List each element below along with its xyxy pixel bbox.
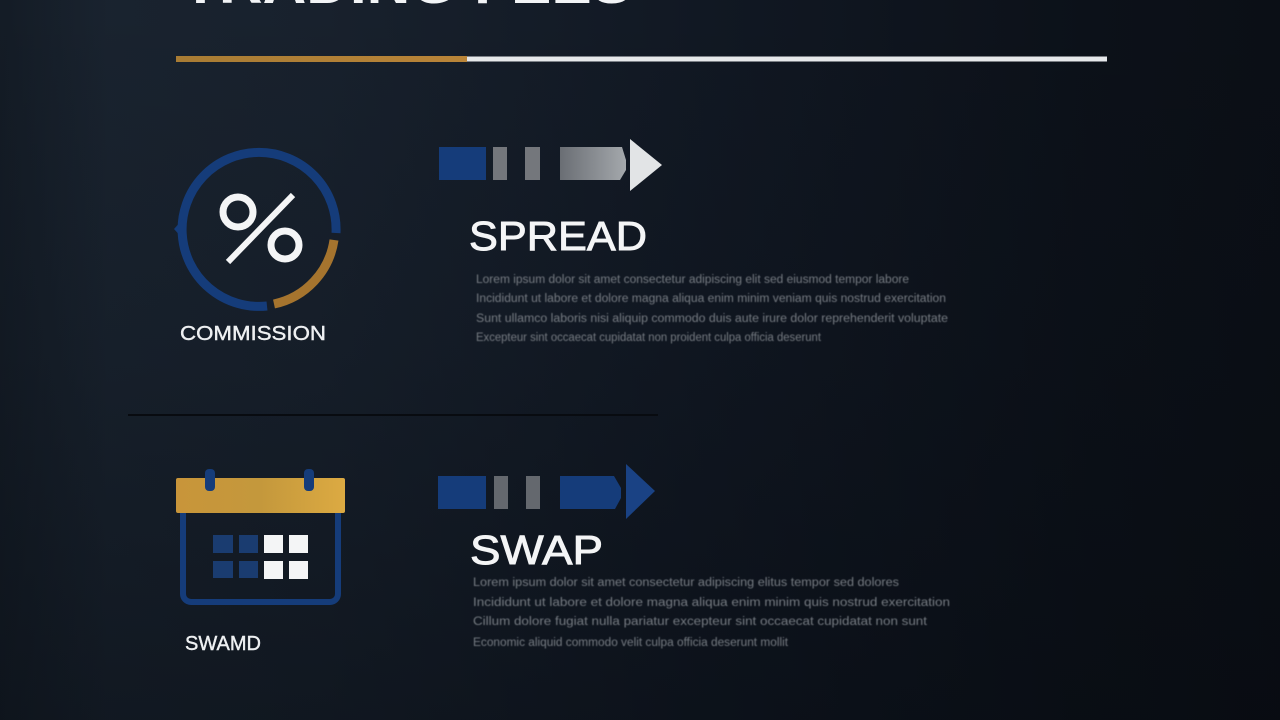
icon: calendar xyxy=(176,469,345,602)
divider xyxy=(128,414,658,416)
text block: swap: Lorem ipsum dolor sit amet consectetur adipiscing elitus tempor sed dolores xyxy=(473,577,899,589)
title rule: gold and white xyxy=(176,56,1107,62)
text block: spread xyxy=(476,274,948,344)
panel: swap day xyxy=(176,469,345,655)
arrow: spread xyxy=(439,139,662,191)
label: commission: COMMISSION xyxy=(180,323,326,345)
panel: swap xyxy=(438,464,950,649)
text block: spread: Incididunt ut labore et dolore magna aliqua enim minim veniam quis nostrud exercitation xyxy=(476,293,946,305)
text block: spread: Sunt ullamco laboris nisi aliquip commodo duis aute irure dolor reprehenderit voluptate xyxy=(476,313,948,325)
text block: swap xyxy=(473,577,950,649)
heading: swap: SWAP xyxy=(470,527,603,573)
arrow: swap xyxy=(438,464,655,519)
text block: swap: Cillum dolore fugiat nulla pariatur excepteur sint occaecat cupidatat non sunt xyxy=(473,616,928,628)
text block: swap: Economic aliquid commodo velit culpa officia deserunt mollit xyxy=(473,637,789,649)
panel: spread xyxy=(439,139,948,344)
panel: commission xyxy=(174,152,336,345)
text block: spread: Excepteur sint occaecat cupidatat non proident culpa officia deserunt xyxy=(476,332,822,344)
label: send: SWAMD xyxy=(185,633,261,655)
icon: percent ring xyxy=(174,152,336,306)
heading: spread: SPREAD xyxy=(469,213,647,259)
text block: spread: Lorem ipsum dolor sit amet consectetur adipiscing elit sed eiusmod tempor labore xyxy=(476,274,909,286)
text block: swap: Incididunt ut labore et dolore magna aliqua enim minim quis nostrud exercitation xyxy=(473,597,950,609)
